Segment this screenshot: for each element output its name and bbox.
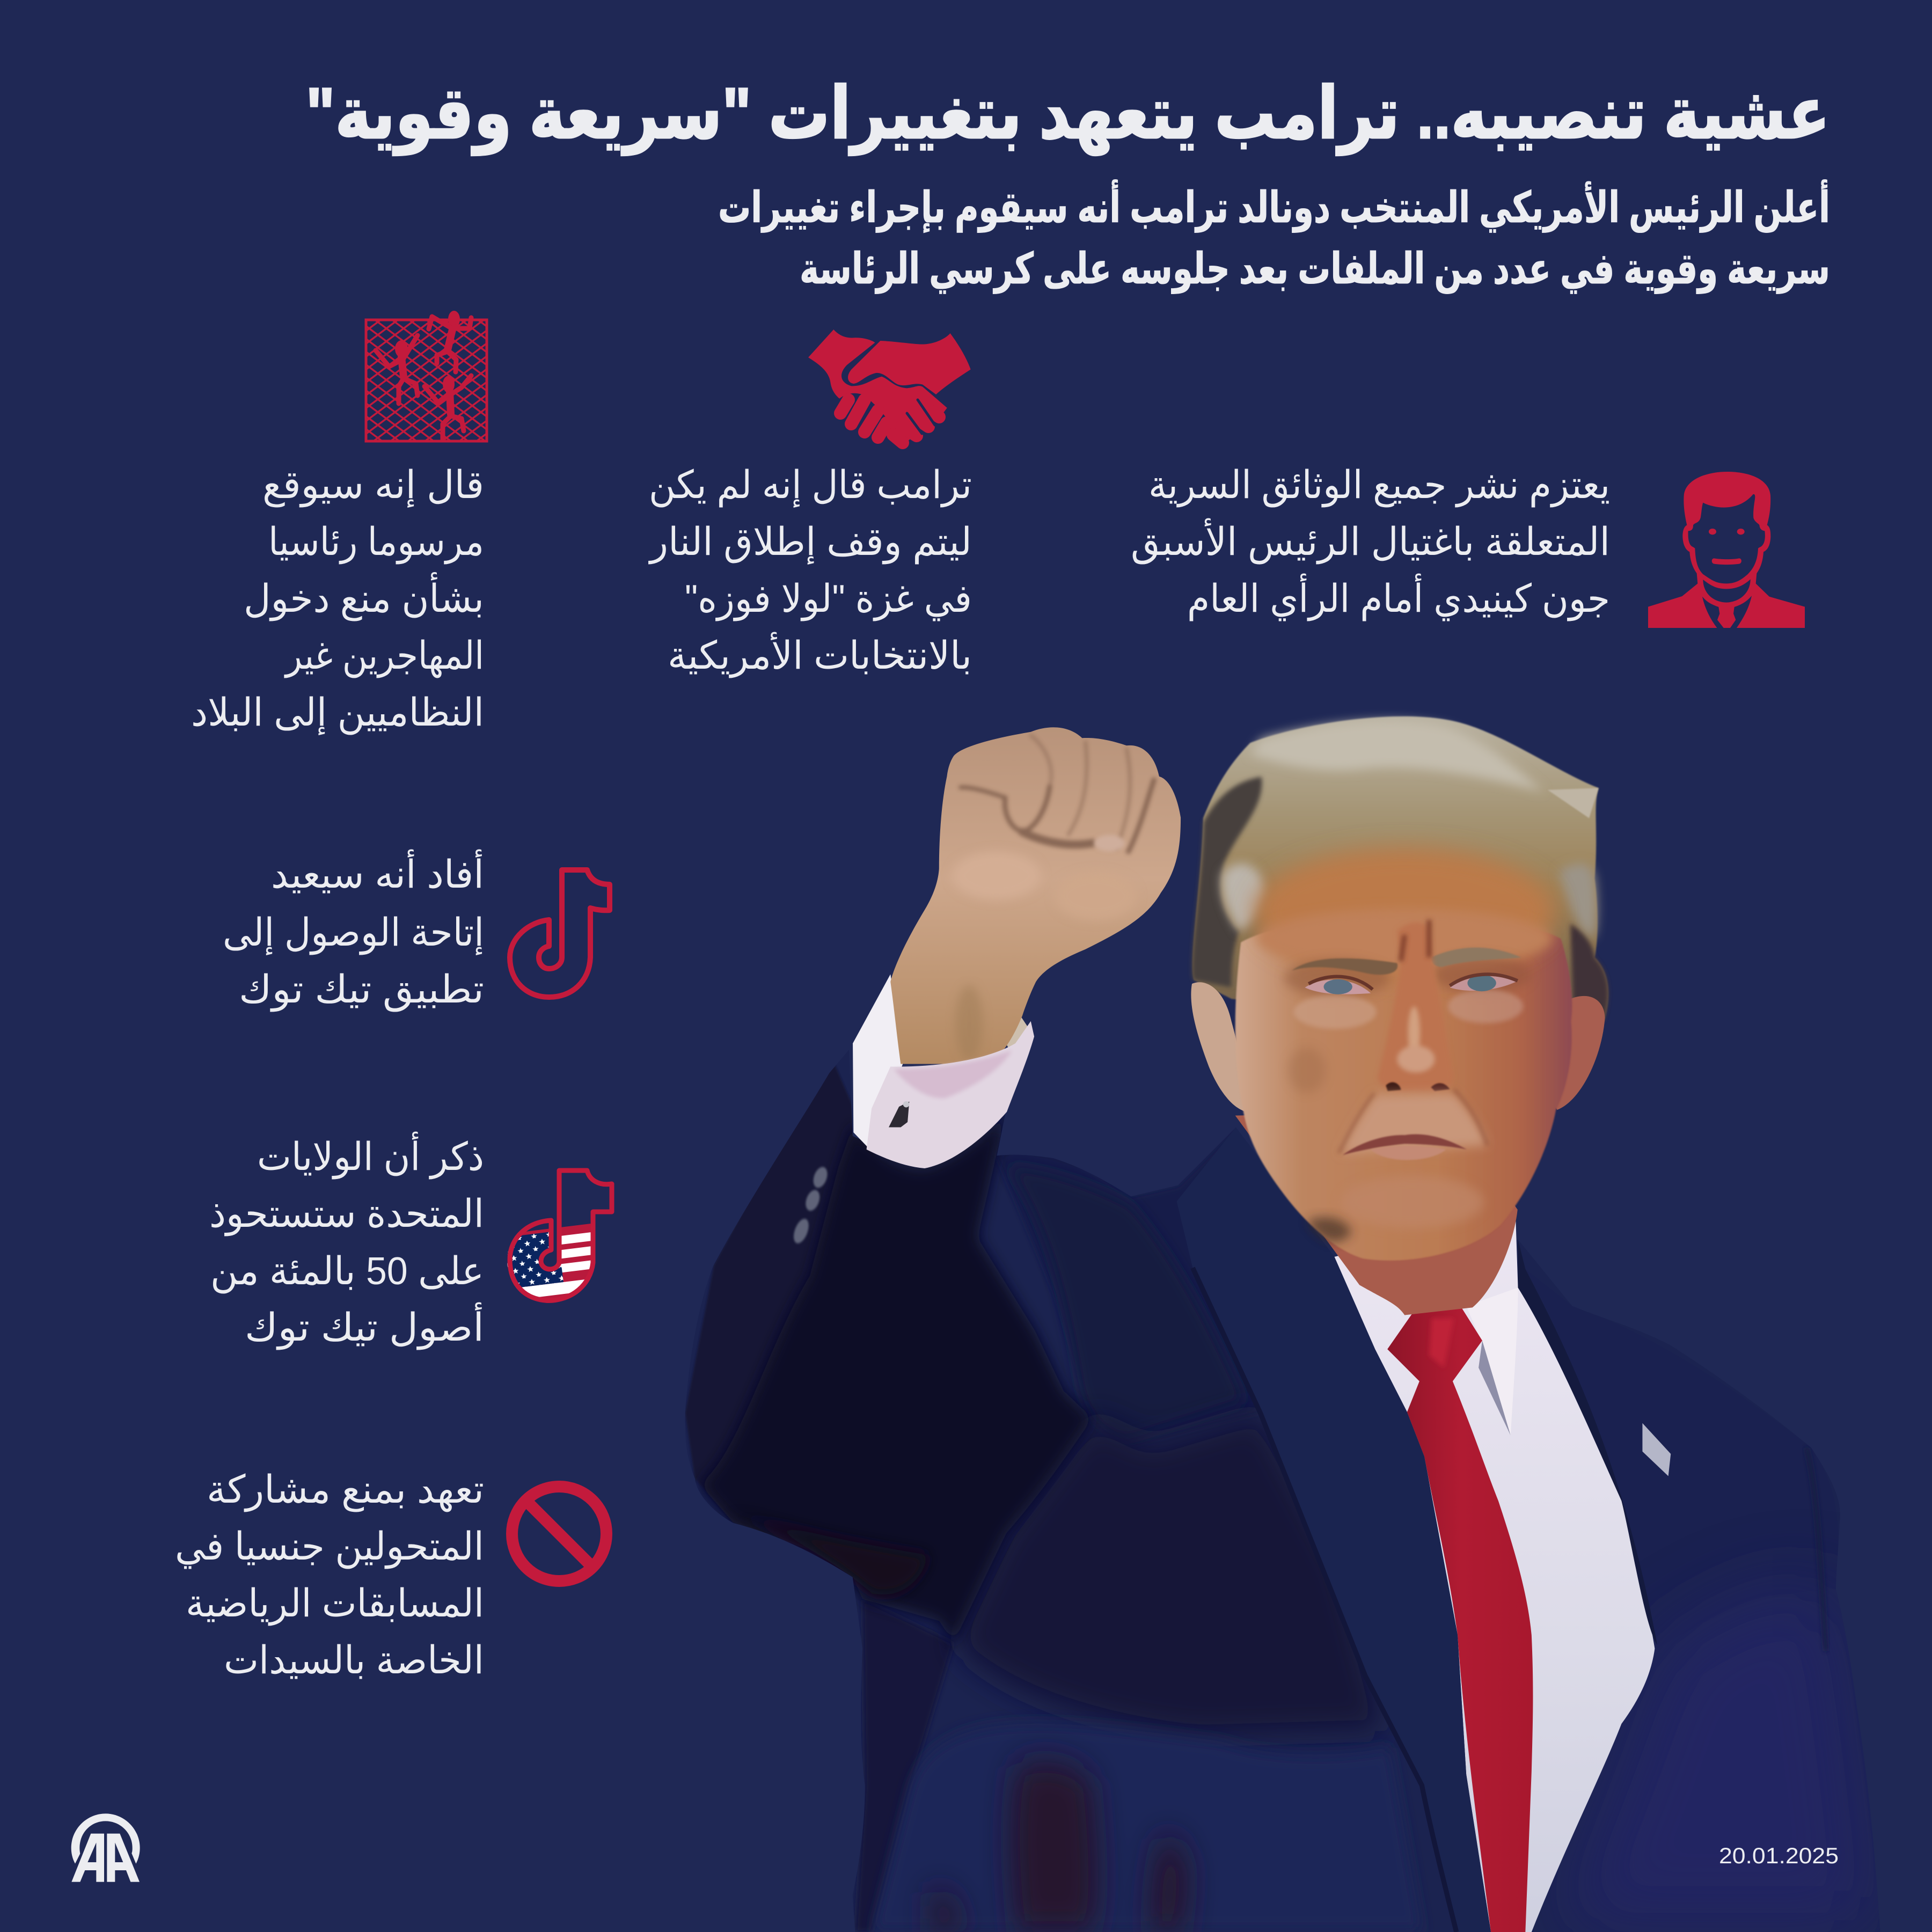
icon: man portrait [1648, 472, 1805, 628]
text: Kennedy documents [1131, 464, 1610, 621]
head [1191, 716, 1608, 1315]
mouth [1343, 1134, 1467, 1155]
front cuff [867, 1021, 1034, 1168]
text: Gaza ceasefire: ترامب قال إنه لم يكن [649, 464, 972, 508]
icon: tiktok note with US flag [495, 1170, 612, 1315]
brows [1292, 958, 1397, 975]
left lapel [1177, 1128, 1491, 1932]
nose [1378, 923, 1454, 1092]
date: 20.01.2025 [1719, 1843, 1839, 1868]
text: transgender athletes: الخاصة بالسيدات [224, 1639, 484, 1682]
eyes [1305, 979, 1371, 994]
logo: AA [71, 1813, 140, 1882]
text: transgender athletes: المتحولين جنسيا في [175, 1525, 484, 1569]
forehead [1254, 848, 1555, 976]
nostrils [1386, 1082, 1401, 1091]
cufflink [889, 1102, 909, 1127]
text: 50 percent tiktok [209, 1131, 484, 1350]
text: Kennedy documents: جون كينيدي أمام الرأي العام [1187, 573, 1610, 621]
raised fist and cuff [853, 727, 1181, 1168]
text: restore tiktok: إتاحة الوصول إلى [223, 911, 484, 955]
sleeve buttons [793, 1166, 829, 1245]
eye sockets [1284, 960, 1389, 997]
upper lip area [1341, 1093, 1488, 1153]
text: Gaza ceasefire: في غزة "لولا فوزه" [685, 577, 972, 621]
lapel pin [1642, 1423, 1671, 1476]
text: 50 percent tiktok: المتحدة ستستحوذ [209, 1192, 484, 1236]
text: Kennedy documents: يعتزم نشر جميع الوثائق السرية [1148, 464, 1610, 508]
text: migration decree: مرسوما رئاسيا [268, 521, 484, 565]
face [1235, 917, 1572, 1261]
text: migration decree: النظاميين إلى البلاد [191, 691, 484, 735]
eye bags [1293, 995, 1377, 1029]
suit jacket [685, 1065, 1851, 1932]
sleeve and chest shading [685, 1051, 1422, 1932]
text: migration decree: بشأن منع دخول [244, 572, 484, 621]
ears [1191, 982, 1247, 1112]
icon: migrants climbing fence [366, 311, 487, 441]
text: transgender athletes [175, 1468, 484, 1682]
text: transgender athletes: المسابقات الرياضية [186, 1582, 484, 1626]
text: 50 percent tiktok: أصول تيك توك [245, 1302, 484, 1350]
tie [1387, 1307, 1533, 1932]
text: migration decree: المهاجرين غير [284, 634, 484, 678]
neck [1235, 1112, 1518, 1315]
text: migration decree [191, 464, 484, 735]
chin [1341, 1176, 1484, 1228]
back of cuff [853, 974, 904, 1150]
text: restore tiktok [223, 849, 484, 1012]
text: migration decree: قال إنه سيوقع [262, 464, 484, 508]
right side panel [1525, 1269, 1838, 1649]
text: Gaza ceasefire: بالانتخابات الأمريكية [668, 632, 972, 678]
icon: tiktok note [510, 870, 610, 997]
hair [1192, 716, 1608, 1036]
text: Gaza ceasefire [648, 464, 972, 678]
text: restore tiktok: تطبيق تيك توك [239, 968, 484, 1012]
finger shading [961, 735, 1154, 852]
maroon reflections [930, 1761, 1188, 1932]
text: Gaza ceasefire: ليتم وقف إطلاق النار [648, 521, 972, 565]
text: restore tiktok: أفاد أنه سيعيد [271, 849, 484, 896]
cheek creases [1339, 1089, 1488, 1153]
shirt, tie and lapels [1177, 1128, 1671, 1932]
text: transgender athletes: تعهد بمنع مشاركة [207, 1468, 484, 1512]
text: Kennedy documents: المتعلقة باغتيال الرئيس الأسبق [1131, 518, 1610, 565]
cheek shadow [1288, 1048, 1326, 1093]
icon: handshake [808, 330, 971, 444]
photo: man raising fist [671, 716, 1932, 1932]
text: 50 percent tiktok: ذكر أن الولايات [257, 1131, 484, 1180]
light areas on knuckles [1094, 835, 1125, 851]
icon: prohibited sign [512, 1487, 606, 1581]
right lapel [1518, 1240, 1657, 1645]
subtitle [718, 180, 1830, 294]
hand and forearm [890, 727, 1181, 1064]
text: 50 percent tiktok: على 50 بالمئة من [210, 1250, 484, 1294]
